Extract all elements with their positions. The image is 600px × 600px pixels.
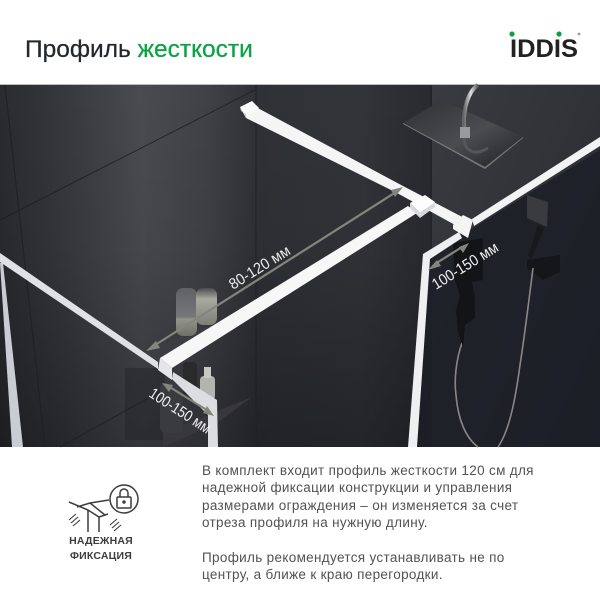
body text: Профиль рекомендуется устанавливать не по [202, 550, 505, 565]
profile connectors [410, 195, 473, 238]
icon label [69, 535, 133, 562]
icon: reliable fixation [69, 485, 138, 532]
body text: В комплект входит профиль жесткости 120 см для [202, 463, 534, 478]
dimension label: 80-120 мм: 80-120 мм [226, 242, 294, 293]
shelf and bottles [125, 288, 252, 447]
stiffening profile: top bar [240, 101, 470, 231]
stiffening profile: main bar [158, 206, 417, 380]
body text: отреза профиля на нужную длину. [202, 515, 428, 530]
body text: надежной фиксации конструкции и управления [202, 480, 512, 495]
dimension arrows [146, 187, 469, 416]
dimension label: 100-150 мм left: 100-150 мм [146, 385, 214, 437]
body text: размерами ограждения – он изменяется за счет [202, 498, 518, 513]
icon label: ФИКСАЦИЯ [70, 550, 132, 562]
title: Профиль жесткости [25, 36, 253, 63]
body text: центру, а ближе к краю перегородки. [202, 567, 443, 582]
right glass frame [408, 137, 600, 447]
hand shower and hose [453, 195, 560, 447]
wall background [0, 84, 600, 447]
shower head [403, 85, 523, 169]
body text [202, 463, 534, 582]
logo: IDDIS: IDDIS [510, 35, 578, 63]
icon label: НАДЕЖНАЯ [69, 535, 133, 547]
left glass frame [0, 253, 218, 447]
dimension label: 100-150 мм right: 100-150 мм [429, 239, 502, 293]
